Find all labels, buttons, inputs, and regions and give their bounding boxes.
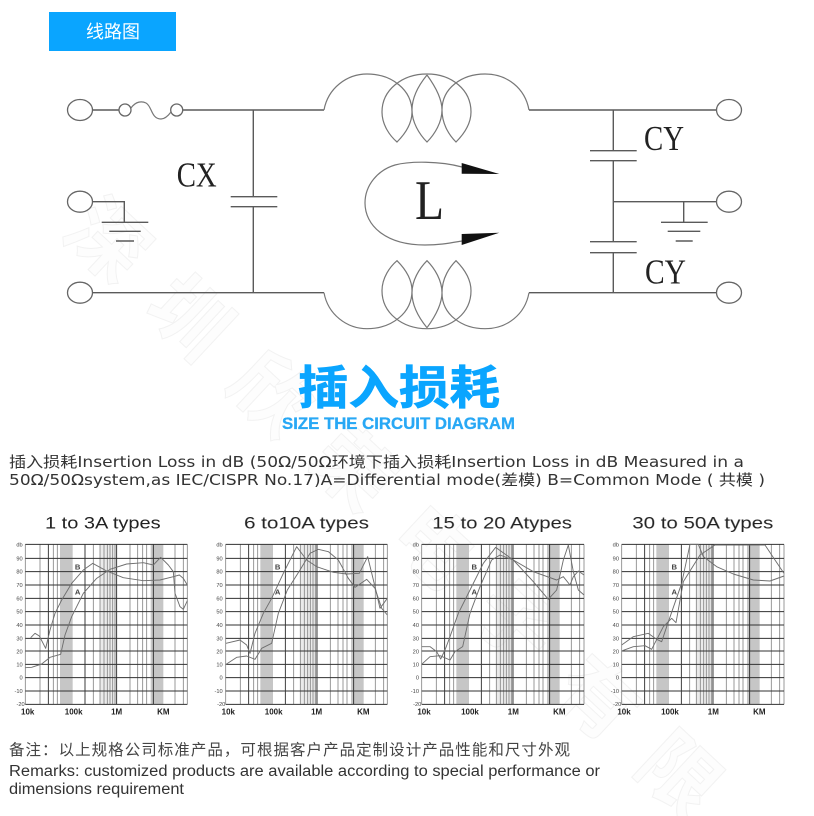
chart: 1 to 3A types: 1M [111,707,123,716]
right ground [661,202,708,241]
chart: 30 to 50A types: 30 to 50A types [632,513,773,532]
top common-mode coil [324,74,529,142]
chart: 15 to 20 Atypes: KM [553,707,566,716]
chart: 15 to 20 Atypes: B [472,562,478,571]
description text: 50Ω/50Ωsystem,as IEC/CISPR No.17)A=Differential mode(差模) B=Common Mode ( 共模 ) [9,471,765,489]
chart: 1 to 3A types: 10k [21,707,35,716]
footnote: 备注: 备注：以上规格公司标准产品，可根据客户产品定制设计产品性能和尺寸外观 [9,741,570,759]
chart: 1 to 3A types: 10 [16,662,23,668]
capacitor CX: CX [177,156,217,195]
capacitor CX [177,110,277,293]
watermark: 深圳欣荣电子有限 [48,183,737,816]
chart: 15 to 20 Atypes: -10 [411,689,419,695]
chart: 6 to10A types: KM [357,707,370,716]
chart: 30 to 50A types: A [672,587,678,596]
chart: 30 to 50A types: B [672,562,678,571]
chart: 30 to 50A types: 30 [613,636,619,642]
header tag: 线路图 [49,12,176,51]
chart: 1 to 3A types: 50 [16,610,23,616]
chart: 1 to 3A types: KM [157,707,170,716]
chart: 15 to 20 Atypes: 50 [413,610,419,616]
chart: 30 to 50A types: db [613,543,619,549]
chart: 30 to 50A types: 70 [613,583,619,589]
chart: 30 to 50A types: KM [753,707,766,716]
chart: 30 to 50A types: 60 [613,596,619,602]
chart: 6 to10A types: 6 to10A types [244,513,369,532]
chart: 30 to 50A types: 40 [613,623,619,629]
chart: 1 to 3A types: 80 [16,570,23,576]
remarks [9,763,600,798]
circuit diagram [68,74,742,329]
chart: 6 to10A types: 30 [216,636,223,642]
chart: 1 to 3A types: 1 to 3A types [45,513,161,532]
chart: 1 to 3A types: -10 [14,689,23,695]
chart: 30 to 50A types: 1M [708,707,719,716]
section title: SIZE THE CIRCUIT DIAGRAM [282,415,515,433]
chart: 15 to 20 Atypes: A [472,587,478,596]
remarks: Remarks: customized products are available according to special performance or [9,763,600,780]
chart: 1 to 3A types: 100k [65,707,83,716]
capacitors CY [590,110,686,293]
description text: 插入损耗Insertion Loss in dB (50Ω/50Ω环境下插入损耗Insertion Loss in dB Measured in a [9,453,744,471]
chart: 15 to 20 Atypes: 100k [461,707,479,716]
chart: 6 to10A types: db [216,543,223,549]
output lines [529,110,717,293]
chart: 30 to 50A types: 10 [613,662,619,668]
chart: 6 to10A types: 50 [216,610,223,616]
chart: 15 to 20 Atypes: db [413,543,419,549]
capacitors CY: CY [645,252,686,291]
chart: 15 to 20 Atypes: 60 [413,596,419,602]
chart: 1 to 3A types: 60 [16,596,23,602]
inductor current arrows and L: L [415,170,444,232]
chart: 1 to 3A types: 90 [16,556,23,562]
chart: 6 to10A types: 10k [222,707,236,716]
chart: 30 to 50A types: 0 [616,676,619,682]
chart: 30 to 50A types: -20 [613,702,621,708]
chart: 15 to 20 Atypes: 10k [417,707,431,716]
chart: 15 to 20 Atypes [411,513,584,716]
output terminals [716,100,742,303]
chart: 6 to10A types: -10 [214,689,223,695]
chart: 15 to 20 Atypes: 15 to 20 Atypes [432,513,572,532]
chart: 6 to10A types: 20 [216,649,223,655]
chart: 1 to 3A types: 40 [16,623,23,629]
chart: 15 to 20 Atypes: -20 [413,702,421,708]
chart: 30 to 50A types: 100k [661,707,679,716]
chart: 6 to10A types: 60 [216,596,223,602]
chart: 1 to 3A types: 30 [16,636,23,642]
fuse [92,102,324,119]
chart: 1 to 3A types: B [75,562,81,571]
chart: 6 to10A types: 100k [265,707,283,716]
section title [282,362,515,433]
bottom input line [92,292,324,294]
chart: 15 to 20 Atypes: 80 [413,570,419,576]
chart: 15 to 20 Atypes: 20 [413,649,419,655]
capacitors CY: CY [644,119,684,158]
chart: 1 to 3A types: -20 [16,702,25,708]
chart: 6 to10A types: B [275,562,281,571]
chart: 15 to 20 Atypes: 70 [413,583,419,589]
bottom common-mode coil [324,261,529,329]
chart: 30 to 50A types: 20 [613,649,619,655]
chart: 6 to10A types: 90 [216,556,223,562]
section title: 插入损耗 [298,362,500,414]
chart: 1 to 3A types [14,513,187,716]
chart: 15 to 20 Atypes: 30 [413,636,419,642]
chart: 30 to 50A types: 80 [613,570,619,576]
chart: 6 to10A types: 80 [216,570,223,576]
header tag: 线路图: 线路图 [86,22,140,42]
chart: 30 to 50A types: 90 [613,556,619,562]
chart: 30 to 50A types: 10k [617,707,631,716]
chart: 1 to 3A types: 70 [16,583,23,589]
inductor current arrows and L [365,162,499,245]
description text [9,453,765,489]
chart: 6 to10A types: 1M [311,707,323,716]
chart: 30 to 50A types: 50 [613,610,619,616]
chart: 6 to10A types: 70 [216,583,223,589]
chart: 15 to 20 Atypes: 90 [413,556,419,562]
left ground [92,202,148,241]
chart: 15 to 20 Atypes: 10 [413,662,419,668]
chart: 1 to 3A types: 20 [16,649,23,655]
chart: 30 to 50A types [611,513,784,716]
chart: 6 to10A types [214,513,387,716]
chart: 6 to10A types: -20 [217,702,225,708]
chart: 1 to 3A types: 0 [20,676,23,682]
chart: 6 to10A types: 10 [216,662,223,668]
chart: 6 to10A types: 0 [220,676,223,682]
remarks: dimensions requirement [9,781,185,798]
chart: 30 to 50A types: -10 [611,689,619,695]
input terminals [68,100,92,303]
chart: 15 to 20 Atypes: 40 [413,623,419,629]
chart: 1 to 3A types: A [75,587,81,596]
chart: 15 to 20 Atypes: 1M [508,707,519,716]
chart: 6 to10A types: A [275,587,281,596]
chart: 1 to 3A types: db [16,543,23,549]
chart: 6 to10A types: 40 [216,623,223,629]
chart: 15 to 20 Atypes: 0 [416,676,419,682]
